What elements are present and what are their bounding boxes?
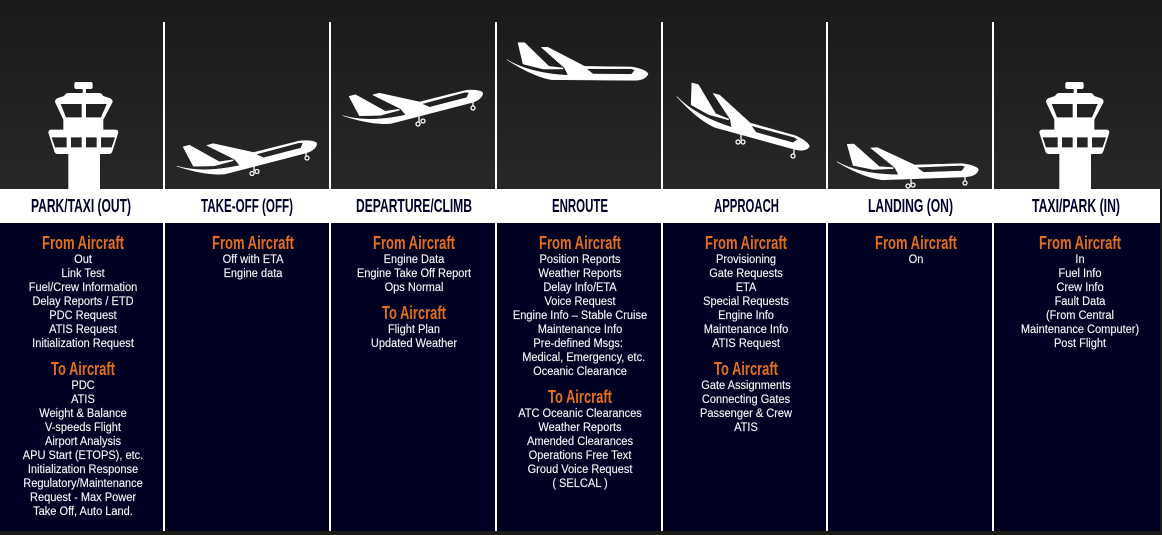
header: take-off: TAKE-OFF (OFF) bbox=[201, 195, 293, 216]
list: from aircraft: Engine data bbox=[224, 268, 283, 280]
list: to aircraft: Groud Voice Request bbox=[528, 464, 633, 476]
heading: from aircraft: From Aircraft bbox=[705, 232, 787, 253]
header: landing on: LANDING (ON) bbox=[868, 195, 953, 216]
list: from aircraft: On bbox=[909, 254, 923, 266]
list: to aircraft: Passenger & Crew bbox=[700, 408, 793, 420]
list: from aircraft: Engine Data bbox=[384, 254, 445, 266]
list: from aircraft bbox=[29, 254, 137, 350]
heading: to aircraft: To Aircraft bbox=[382, 302, 446, 323]
list: from aircraft: Maintenance Info bbox=[538, 324, 622, 336]
list: to aircraft: Request - Max Power bbox=[30, 492, 136, 504]
list: from aircraft: Provisioning bbox=[716, 254, 776, 266]
list: to aircraft: Amended Clearances bbox=[527, 436, 633, 448]
list: to aircraft bbox=[371, 324, 457, 350]
list: to aircraft: Take Off, Auto Land. bbox=[33, 506, 133, 518]
list: from aircraft: Fuel/Crew Information bbox=[29, 282, 137, 294]
icon: plane landing bbox=[836, 139, 979, 188]
list: from aircraft: Maintenance Computer) bbox=[1021, 324, 1139, 336]
list: to aircraft bbox=[518, 408, 642, 490]
list: to aircraft: Connecting Gates bbox=[702, 394, 790, 406]
list: to aircraft: Weather Reports bbox=[538, 422, 622, 434]
list: to aircraft: ATC Oceanic Clearances bbox=[518, 408, 642, 420]
header: enroute: ENROUTE bbox=[552, 195, 608, 216]
list: from aircraft bbox=[223, 254, 284, 280]
icon: control tower right bbox=[1039, 82, 1109, 189]
list: from aircraft: Off with ETA bbox=[223, 254, 284, 266]
icon: plane enroute bbox=[507, 43, 648, 80]
list: from aircraft: In bbox=[1075, 254, 1085, 266]
list: from aircraft: Pre-defined Msgs: bbox=[533, 338, 623, 350]
list: to aircraft: ATIS bbox=[734, 422, 758, 434]
navy content band bbox=[0, 223, 1160, 531]
list: from aircraft: Initialization Request bbox=[32, 338, 135, 350]
list: to aircraft: PDC bbox=[71, 380, 95, 392]
list: from aircraft: ATIS Request bbox=[49, 324, 118, 336]
heading: from aircraft: From Aircraft bbox=[212, 232, 294, 253]
list: from aircraft: Ops Normal bbox=[385, 282, 443, 294]
list: from aircraft: Fuel Info bbox=[1059, 268, 1101, 280]
header: park/taxi out: PARK/TAXI (OUT) bbox=[31, 195, 131, 216]
panel: taxi/park messages bbox=[1021, 232, 1139, 350]
header: approach: APPROACH bbox=[714, 195, 779, 216]
list: from aircraft: Special Requests bbox=[703, 296, 789, 308]
list: to aircraft: Weight & Balance bbox=[39, 408, 127, 420]
heading: from aircraft: From Aircraft bbox=[1039, 232, 1121, 253]
list: from aircraft: Engine Info – Stable Cruise bbox=[513, 310, 647, 322]
heading: from aircraft: From Aircraft bbox=[373, 232, 455, 253]
list: to aircraft: Operations Free Text bbox=[529, 450, 632, 462]
list: from aircraft: ETA bbox=[736, 282, 757, 294]
list: from aircraft bbox=[513, 254, 647, 378]
list: from aircraft: Oceanic Clearance bbox=[533, 366, 627, 378]
list: from aircraft: Weather Reports bbox=[538, 268, 622, 280]
list: from aircraft: Voice Request bbox=[544, 296, 616, 308]
icon: plane approach bbox=[671, 80, 817, 158]
heading: from aircraft: From Aircraft bbox=[875, 232, 957, 253]
list: from aircraft: Link Test bbox=[61, 268, 105, 280]
icon: control tower left bbox=[48, 82, 118, 189]
list: from aircraft: Maintenance Info bbox=[704, 324, 788, 336]
heading: from aircraft: From Aircraft bbox=[539, 232, 621, 253]
heading: from aircraft: From Aircraft bbox=[42, 232, 124, 253]
list: from aircraft: Crew Info bbox=[1056, 282, 1104, 294]
list: from aircraft bbox=[703, 254, 789, 350]
icon: plane take-off bbox=[172, 113, 318, 186]
list: from aircraft: Delay Info/ETA bbox=[543, 282, 617, 294]
sky band bbox=[0, 0, 1162, 189]
list: from aircraft: Post Flight bbox=[1054, 338, 1107, 350]
list: from aircraft: Engine Take Off Report bbox=[357, 268, 472, 280]
list: to aircraft bbox=[23, 380, 143, 518]
list: from aircraft: Medical, Emergency, etc. bbox=[522, 352, 645, 364]
list: to aircraft bbox=[700, 380, 793, 434]
panel: landing messages bbox=[875, 232, 957, 266]
list: to aircraft: Updated Weather bbox=[371, 338, 457, 350]
list: to aircraft: Flight Plan bbox=[388, 324, 440, 336]
list: from aircraft: ATIS Request bbox=[712, 338, 781, 350]
list: from aircraft bbox=[357, 254, 472, 294]
list: from aircraft: Position Reports bbox=[540, 254, 621, 266]
panel: take-off messages bbox=[212, 232, 294, 280]
panel: approach messages bbox=[700, 232, 793, 434]
header: taxi/park in: TAXI/PARK (IN) bbox=[1032, 195, 1120, 216]
list: from aircraft: Out bbox=[74, 254, 93, 266]
list: from aircraft: Engine Info bbox=[718, 310, 774, 322]
header: departure climb: DEPARTURE/CLIMB bbox=[356, 195, 472, 216]
list: from aircraft: Delay Reports / ETD bbox=[32, 296, 134, 308]
icon: plane departure climb bbox=[338, 63, 484, 136]
list: to aircraft: V-speeds Flight bbox=[45, 422, 122, 434]
heading: to aircraft: To Aircraft bbox=[714, 358, 778, 379]
list: from aircraft bbox=[1021, 254, 1139, 350]
list: from aircraft: Gate Requests bbox=[709, 268, 783, 280]
list: to aircraft: APU Start (ETOPS), etc. bbox=[23, 450, 143, 462]
heading: to aircraft: To Aircraft bbox=[51, 358, 115, 379]
list: from aircraft: Fault Data bbox=[1055, 296, 1106, 308]
list: to aircraft: ATIS bbox=[71, 394, 95, 406]
list: from aircraft: PDC Request bbox=[49, 310, 117, 322]
list: to aircraft: Initialization Response bbox=[28, 464, 138, 476]
list: from aircraft: (From Central bbox=[1046, 310, 1114, 322]
panel: departure messages bbox=[357, 232, 472, 350]
list: to aircraft: ( SELCAL ) bbox=[552, 478, 608, 490]
heading: to aircraft: To Aircraft bbox=[548, 386, 612, 407]
panel: enroute messages bbox=[513, 232, 647, 490]
list: to aircraft: Airport Analysis bbox=[45, 436, 121, 448]
list: to aircraft: Gate Assignments bbox=[701, 380, 791, 392]
header band bbox=[0, 189, 1160, 223]
list: to aircraft: Regulatory/Maintenance bbox=[23, 478, 143, 490]
panel: park/taxi messages bbox=[23, 232, 143, 518]
